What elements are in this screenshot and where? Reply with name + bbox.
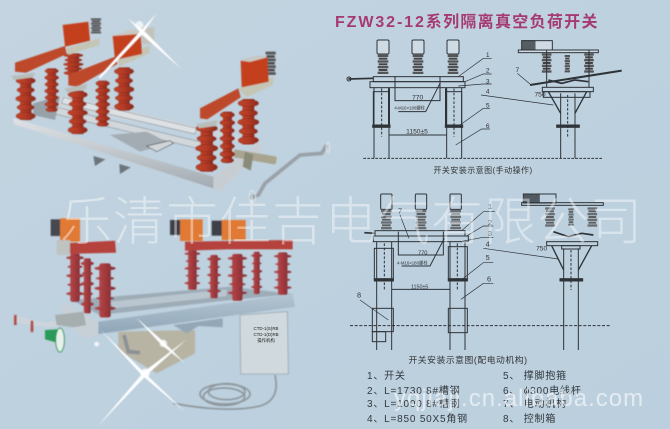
parts legend: 2、L=1730 8#槽钢 [367, 384, 461, 397]
side view [522, 194, 603, 350]
dimension and callout numbers [357, 202, 548, 299]
parts legend: 3、L=1000 8#槽钢 [367, 397, 461, 410]
dimension and callout numbers [394, 52, 546, 135]
product photo: motor-operated load switch [13, 218, 295, 427]
front view [364, 194, 468, 350]
ground line [350, 324, 610, 327]
cable coil [173, 375, 276, 409]
steel base frame [13, 96, 260, 192]
operating handle [233, 142, 330, 203]
dimension and callout numbers: 7 [398, 206, 402, 215]
leader lines [360, 212, 558, 320]
front view [347, 40, 465, 158]
control box [240, 312, 288, 374]
parts legend: 5、 撑脚抱箍 [503, 369, 567, 382]
parts legend: 1、开关 [367, 369, 406, 382]
parts legend: 4、L=850 50X5角钢 [367, 412, 468, 425]
parts legend: 7、 电动机构 [503, 397, 567, 410]
dimension and callout numbers: 3 [488, 229, 492, 238]
lower mechanism housing [118, 318, 223, 373]
dimension and callout numbers: 4 [486, 89, 490, 96]
dimension and callout numbers: 750 [536, 246, 548, 253]
insulators [16, 53, 259, 172]
dimension and callout numbers: 2 [488, 218, 492, 227]
dimension and callout numbers: 6 [486, 123, 490, 130]
schematic: manual operation installation [347, 40, 622, 158]
parts legend: 8、 控制箱 [503, 412, 556, 425]
star glint [99, 13, 182, 79]
dimension and callout numbers: 6 [487, 275, 491, 284]
dimension and callout numbers: 770 [418, 251, 427, 257]
control box label: 操作机构 [257, 337, 275, 344]
caption: motor operation: 开关安装示意图(配电动机构) [408, 354, 528, 365]
interrupter boxes [51, 218, 246, 255]
control box label: CTD-1(D)RB [253, 332, 279, 337]
dimension and callout numbers: 770 [412, 95, 424, 102]
title: FZW32-12系列隔离真空负荷开关 [335, 12, 599, 31]
dimension and callout numbers: 750 [534, 92, 546, 99]
contact arms [12, 38, 274, 128]
leader lines [456, 58, 553, 145]
dimension and callout numbers: 1 [488, 202, 492, 211]
watermark: company name: 乐清市佳吉电气有限公司 [60, 180, 643, 255]
dimension and callout numbers: 4-M16×180螺栓 [394, 105, 426, 112]
vacuum interrupter boxes [63, 18, 276, 87]
dimension and callout numbers: 5 [486, 253, 490, 262]
watermark: site url: yqjiaji.cn.alibaba.com [394, 385, 644, 412]
control box label [253, 326, 279, 344]
operating handle [13, 312, 86, 352]
dimension and callout numbers: 1150±5 [411, 285, 428, 291]
dimension and callout numbers: 8 [357, 290, 361, 299]
dimension and callout numbers: 1 [486, 52, 490, 59]
parts legend: 6、 ϕ300电线杆 [503, 384, 582, 397]
dimension and callout numbers: 4-M16×180螺栓 [397, 259, 428, 266]
steel frame [62, 287, 295, 338]
dimension and callout numbers: 5 [486, 102, 490, 109]
side view [518, 41, 622, 158]
ground line [363, 157, 603, 160]
dimension and callout numbers: 7 [515, 67, 519, 74]
contact arms [63, 240, 293, 254]
dimension and callout numbers: 3 [486, 78, 490, 85]
caption: manual operation: 开关安装示意图(手动操作) [433, 165, 533, 175]
star glints [94, 317, 187, 427]
dimension and callout numbers: 2 [486, 68, 490, 75]
dimension and callout numbers: 1150±5 [406, 128, 428, 135]
schematic: motor-operated installation [350, 194, 610, 350]
control box label: CTD-1(S)RB [254, 326, 279, 331]
parts legend [367, 369, 582, 425]
insulators [66, 250, 292, 317]
product photo: manual load switch [12, 13, 330, 203]
dimension and callout numbers: 4 [486, 240, 490, 249]
